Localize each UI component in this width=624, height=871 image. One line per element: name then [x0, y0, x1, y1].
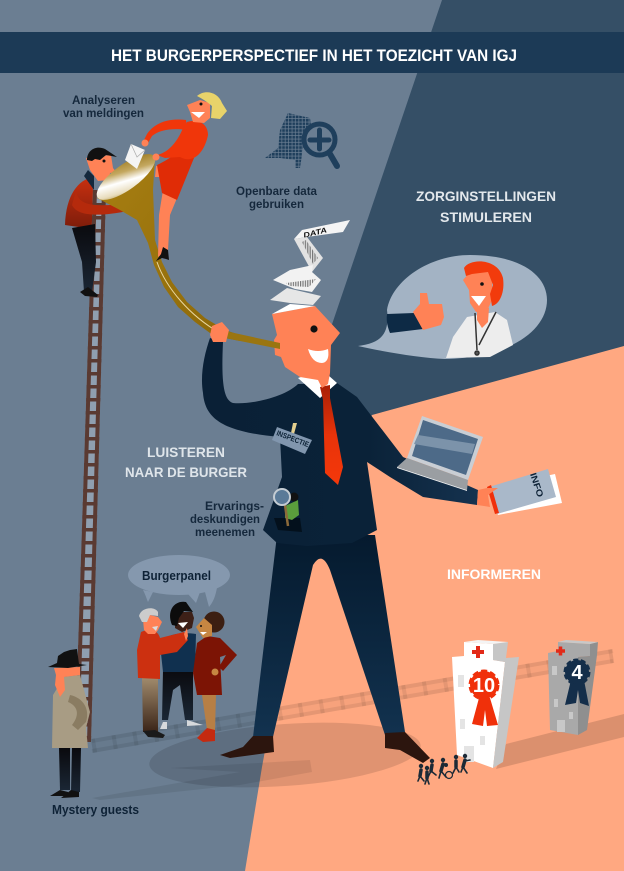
paper: text fold [294, 237, 323, 272]
badge: inspectie [272, 423, 312, 454]
paper: data strip [294, 220, 350, 239]
label: Zorginstellingen stimuleren: ZORGINSTELLINGEN [416, 188, 556, 204]
doctor hair [464, 261, 503, 306]
sleeve and thumbs up [387, 313, 423, 333]
title bar: HET BURGERPERSPECTIEF IN HET TOEZICHT VAN IGJ [111, 47, 517, 65]
ladder shadow on ground [92, 651, 613, 751]
label: Ervaringsdeskundigen meenemen: deskundigen [190, 512, 260, 526]
silhouettes of citizens [418, 754, 470, 784]
right hand [477, 488, 498, 507]
label: Luisteren naar de burger: NAAR DE BURGER [125, 464, 247, 480]
figure: black man of panel [160, 602, 203, 729]
pocket figure with magnifier [274, 489, 302, 532]
label: Openbare data gebruiken: Openbare data [236, 184, 317, 198]
laptop [397, 416, 483, 491]
figure: woman on funnel [125, 92, 227, 261]
label: Openbare data gebruiken: gebruiken [249, 197, 304, 211]
horn tip [225, 331, 280, 349]
paper: fold 3 [270, 288, 321, 305]
rosette 4: 4 [571, 662, 583, 684]
info booklet [487, 469, 562, 515]
label: Analyseren van meldingen: Analyseren [72, 93, 135, 107]
data papers from the head: DATA [302, 225, 328, 240]
figure: inspector [202, 304, 562, 763]
title bar [0, 32, 624, 73]
label: Analyseren van meldingen: van meldingen [63, 106, 144, 120]
label: Ervaringsdeskundigen meenemen: Ervarings- [205, 499, 264, 513]
hospital score 10 [452, 640, 519, 768]
figure: old man of panel [137, 608, 188, 738]
building shadows [496, 714, 624, 769]
label: Ervaringsdeskundigen meenemen: meenemen [195, 525, 255, 539]
hospital score 4 [548, 640, 598, 735]
doctor stethoscope [475, 312, 496, 355]
figure: woman of panel [193, 612, 237, 742]
head [272, 306, 340, 388]
jacket [202, 338, 478, 546]
raised hand [210, 322, 229, 342]
doctor neck [477, 308, 489, 328]
figure: man on ladder [72, 148, 134, 297]
ladder [75, 190, 106, 742]
man on ladder: sweater body [65, 177, 94, 229]
speech bubble with doctor [358, 255, 547, 359]
background: peach panel [245, 346, 624, 871]
icon: map of the Netherlands with magnifier [265, 113, 337, 168]
label: Mystery guests: Mystery guests [52, 803, 139, 817]
speech bubble: Burgerpanel [128, 555, 230, 607]
label: Luisteren naar de burger: LUISTEREN [147, 444, 225, 460]
smile [308, 349, 328, 363]
paper: fold 2 [273, 265, 321, 292]
label: Zorginstellingen stimuleren: STIMULEREN [440, 209, 532, 225]
tie [320, 385, 343, 485]
info booklet: INFO [528, 472, 545, 498]
collar [298, 375, 337, 398]
background: dark blue panel [300, 0, 624, 416]
badge: inspectie: INSPECTIE [275, 428, 310, 449]
doctor head [463, 272, 492, 312]
left shoe [220, 736, 274, 758]
head flap [272, 304, 315, 314]
label: Informeren: INFORMEREN [447, 567, 541, 582]
doctor coat [446, 312, 513, 358]
trousers [253, 535, 405, 737]
figure: mystery guest [48, 649, 90, 798]
speech bubble: Burgerpanel: Burgerpanel [142, 569, 211, 583]
right shoe [385, 732, 430, 763]
funnel horn [90, 146, 240, 341]
data papers from the head [270, 220, 350, 305]
ground shadow of the inspector [92, 715, 423, 800]
rosette 10: 10 [473, 675, 495, 697]
